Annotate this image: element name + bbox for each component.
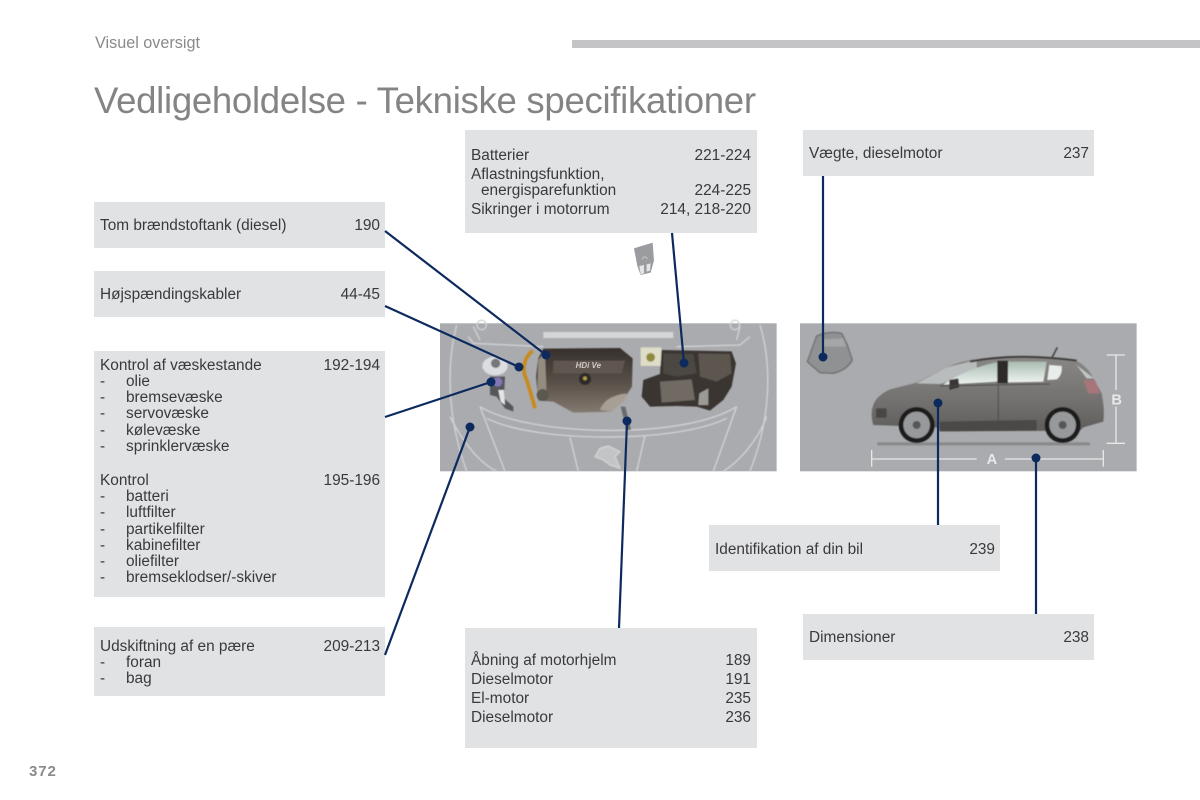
panel: kontrol: Kontrol [100, 472, 149, 489]
panel: kontrol: 195-196 [324, 472, 380, 489]
panel: åbning af motorhjelm: 191 [725, 671, 751, 688]
panel: dimensioner: Dimensioner [809, 629, 895, 646]
panel: batterier: 224-225 [695, 182, 751, 199]
panel: kontrol: - [100, 405, 105, 422]
icon: fuse [634, 243, 654, 275]
wheels [899, 407, 935, 443]
icon: weight blob [807, 332, 852, 373]
panel: udskiftning af en pære: 209-213 [324, 638, 380, 655]
panel: kontrol: oliefilter [126, 553, 179, 570]
roof rail [970, 357, 1077, 362]
leader lines and dots [385, 176, 1040, 655]
panel: tom brændstoftank: Tom brændstoftank (diesel) [100, 217, 286, 234]
panel: identifikation: 239 [969, 541, 995, 558]
panel: åbning af motorhjelm: Åbning af motorhjelm [471, 652, 616, 669]
panel: kontrol: - [100, 488, 105, 505]
tail light [1083, 380, 1100, 393]
fluid reservoirs [482, 357, 508, 375]
lion emblem [595, 446, 620, 468]
panel: kontrol: bremseklodser/-skiver [126, 569, 277, 586]
panel: højspændingskabler: Højspændingskabler [100, 286, 241, 303]
panel: højspændingskabler: 44-45 [341, 286, 380, 303]
windows [943, 362, 999, 385]
panel: dimensioner [803, 614, 1094, 660]
panel: kontrol: bremsevæske [126, 389, 223, 406]
page number: 372 [29, 763, 57, 780]
panel: kontrol: - [100, 422, 105, 439]
section label: Visuel oversigt [95, 34, 200, 52]
engine bay illustration [440, 320, 777, 471]
panel: åbning af motorhjelm: 236 [725, 709, 751, 726]
header bar [572, 40, 1200, 48]
panel: batterier: Aflastningsfunktion, [471, 166, 604, 183]
panel: batterier: energisparefunktion [481, 182, 616, 199]
panel: kontrol: sprinklervæske [126, 438, 230, 455]
car body [872, 356, 1104, 431]
orange cable [524, 351, 535, 408]
dimension A: A [987, 452, 998, 468]
panel: identifikation: Identifikation af din bil [715, 541, 863, 558]
panel: batterier [465, 130, 757, 233]
panel: identifikation [709, 525, 1000, 571]
dipstick [621, 407, 631, 430]
battery cap [641, 347, 661, 366]
panel: batterier: Sikringer i motorrum [471, 201, 610, 218]
panel: kontrol: - [100, 504, 105, 521]
car side view illustration [800, 323, 1137, 471]
panel: kontrol: kabinefilter [126, 537, 200, 554]
dimension A [872, 450, 1103, 468]
panel: kontrol: - [100, 521, 105, 538]
dimension B: B [1111, 393, 1122, 409]
panel: vægte: 237 [1063, 145, 1089, 162]
panel: udskiftning af en pære: foran [126, 654, 161, 671]
panel: udskiftning af en pære: Udskiftning af en pære [100, 638, 255, 655]
panel: kontrol: kølevæske [126, 422, 200, 439]
panel: kontrol: batteri [126, 488, 169, 505]
panel: kontrol: - [100, 438, 105, 455]
panel: åbning af motorhjelm: Dieselmotor [471, 671, 553, 688]
panel: kontrol: - [100, 553, 105, 570]
panel: kontrol: 192-194 [324, 357, 380, 374]
panel: åbning af motorhjelm: Dieselmotor [471, 709, 553, 726]
ground shadow [877, 442, 1090, 445]
panel: batterier: 214, 218-220 [660, 201, 751, 218]
panel: åbning af motorhjelm [465, 628, 757, 748]
panel: højspændingskabler [94, 271, 385, 317]
panel: kontrol: - [100, 569, 105, 586]
panel: dimensioner: 238 [1063, 629, 1089, 646]
panel: udskiftning af en pære: bag [126, 670, 152, 687]
panel: udskiftning af en pære [94, 627, 385, 696]
panel: batterier: Batterier [471, 147, 529, 164]
panel: udskiftning af en pære: - [100, 654, 105, 671]
air filter housing [642, 350, 736, 411]
panel: kontrol: - [100, 389, 105, 406]
dimension B [1107, 355, 1125, 443]
panel: tom brændstoftank: 190 [354, 217, 380, 234]
panel: kontrol: - [100, 537, 105, 554]
panel: åbning af motorhjelm: 235 [725, 690, 751, 707]
panel: kontrol [94, 351, 385, 597]
panel: kontrol: servovæske [126, 405, 209, 422]
engine cover [536, 348, 633, 413]
door sills [940, 420, 1037, 431]
panel: åbning af motorhjelm: El-motor [471, 690, 529, 707]
panel: kontrol: olie [126, 373, 150, 390]
panel: kontrol: luftfilter [126, 504, 176, 521]
panel: åbning af motorhjelm: 189 [725, 652, 751, 669]
panel: vægte: Vægte, dieselmotor [809, 145, 942, 162]
engine bay illustration: HDi Ve [576, 361, 602, 370]
title: Vedligeholdelse - Tekniske specifikationer [94, 80, 756, 121]
panel: tom brændstoftank [94, 202, 385, 248]
panel: kontrol: Kontrol af væskestande [100, 357, 262, 374]
panel: vægte [803, 130, 1094, 176]
mirror [949, 378, 959, 390]
panel: udskiftning af en pære: - [100, 670, 105, 687]
antenna [1052, 347, 1057, 358]
panel: batterier: 221-224 [695, 147, 751, 164]
panel: kontrol: partikelfilter [126, 521, 205, 538]
panel: kontrol: - [100, 373, 105, 390]
